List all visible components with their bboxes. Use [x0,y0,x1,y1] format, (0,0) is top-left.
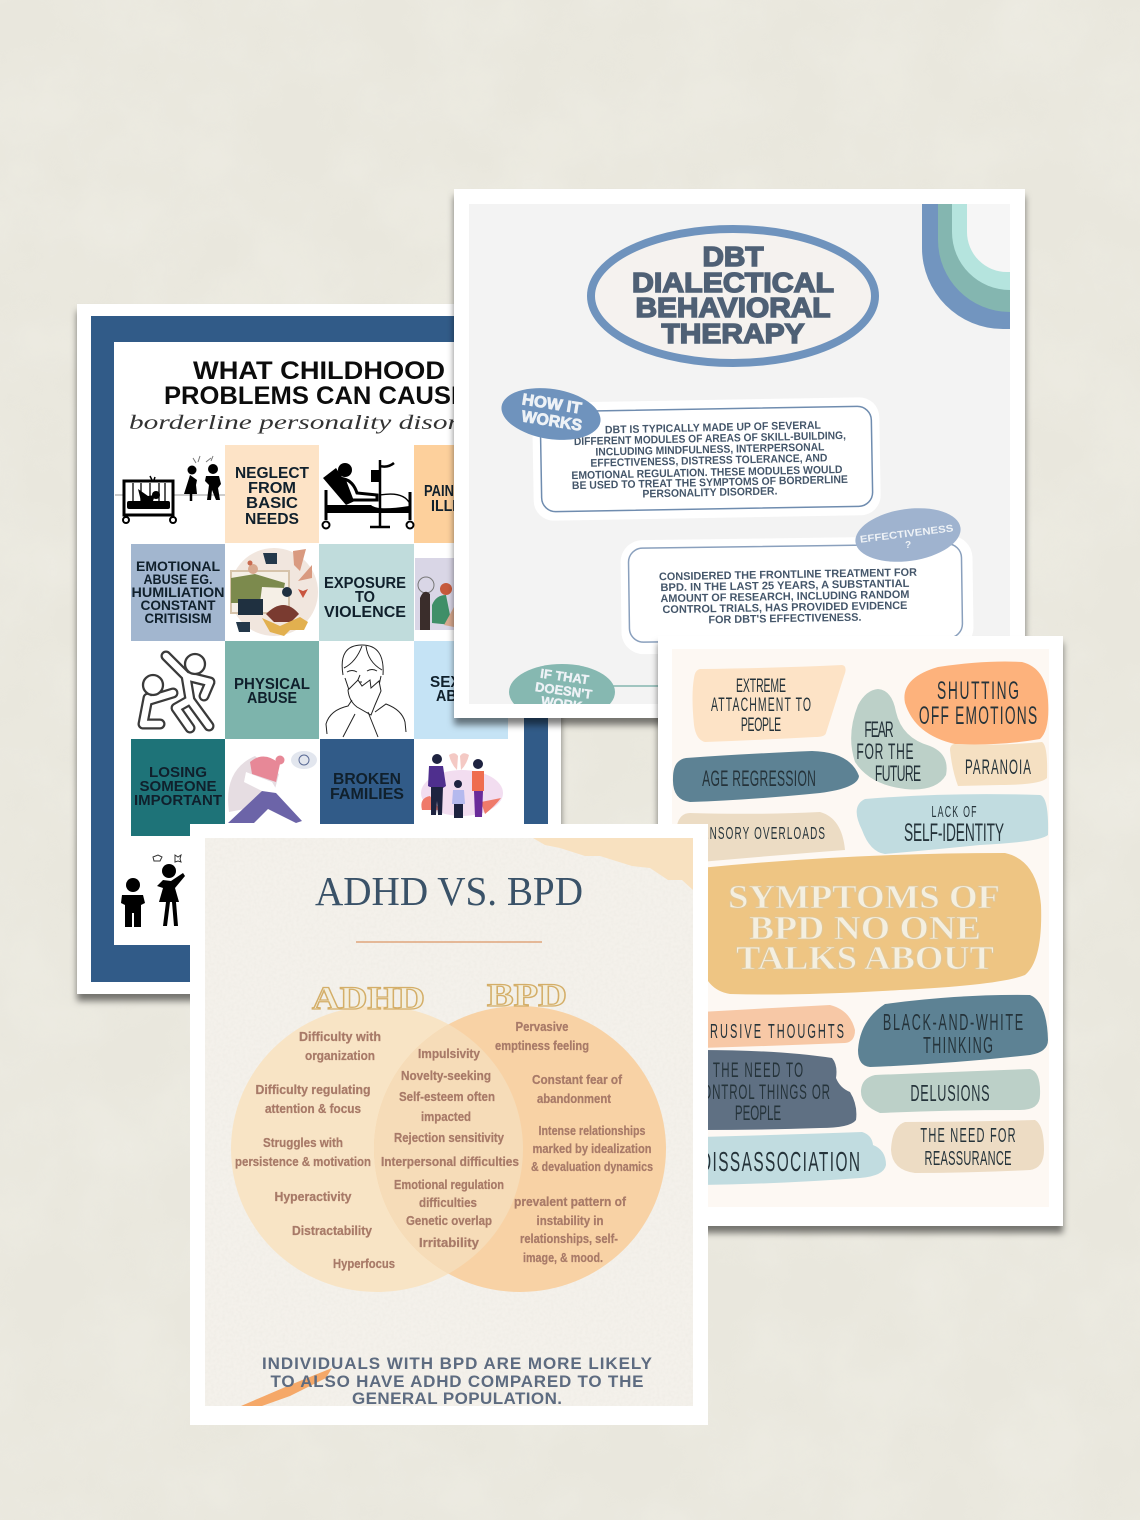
ADHD list: Hyperactivity [274,1189,352,1204]
blob: need to control: CONTROL THINGS OR [693,1080,830,1104]
panel: ADHD vs BPD [190,824,708,1425]
overlap list: Novelty-seeking [401,1068,491,1083]
icon: family separated, broken heart [421,753,503,818]
decorative brush bottom left [241,1368,332,1406]
cell: exposure to violence: VIOLENCE [324,604,406,621]
icon: woman covering mouth [326,645,406,737]
blob: black-and-white thinking: BLACK-AND-WHITE [883,1009,1023,1035]
ADHD list: Struggles with [263,1135,343,1150]
blob: fear for the future: FOR THE [856,739,914,764]
BPD list [495,1019,653,1265]
blob: sensory overloads [677,812,845,862]
text box: effectiveness [620,536,974,654]
cell: neglect from basic needs: NEGLECT [235,465,309,482]
title oval: DBT dialectical behavioral therapy [591,229,875,363]
cell: losing someone important: SOMEONE [140,778,216,795]
blob: lack of self-identity [857,794,1048,854]
blob: lack of self-identity: LACK OF [931,802,977,821]
ADHD list: organization [305,1048,375,1063]
icon: arguing couple silhouette [121,855,185,927]
blob: main title: BPD NO ONE [749,910,981,947]
text box: how it works: INCLUDING MINDFULNESS, INTERPERSONAL [595,441,825,459]
title: ADHD vs BPD: ADHD VS. BPD [315,868,583,914]
blob: extreme attachment: ATTACHMENT TO [711,695,811,716]
blob: extreme attachment: PEOPLE [741,715,781,736]
blob: main title: TALKS ABOUT [736,940,994,977]
BPD list: Pervasive [516,1019,568,1034]
ADHD list: Distractability [292,1223,373,1238]
heading: BPD: BPD [487,978,567,1014]
ADHD list: Hyperfocus [333,1256,395,1271]
cell: emotional abuse [131,544,225,641]
overlap list: Impulsivity [418,1046,481,1061]
ADHD list: attention & focus [265,1101,361,1116]
cell: exposure to violence: TO [355,589,375,606]
cell: broken families [320,739,414,836]
text box: effectiveness: FOR DBT'S EFFECTIVENESS. [708,612,862,626]
decorative brush top right [533,838,693,890]
cell: emotional abuse: HUMILIATION [132,584,224,600]
cell: neglect from basic needs [225,445,319,543]
text box: how it works: BE USED TO TREAT THE SYMPTOMS OF BORDERLINE [572,474,848,492]
blob: main title [698,853,1041,994]
heading: what childhood problems can cause: PROBLEMS CAN CAUSE [164,382,468,410]
icon: baby in crib with arguing parents [115,456,225,523]
blob: need to control: THE NEED TO [713,1058,803,1082]
title oval: DBT dialectical behavioral therapy: THERAPY [662,318,805,349]
blob: delusions [861,1069,1040,1113]
icon: violence scene [415,558,454,630]
cell: exposure to violence: EXPOSURE [324,575,406,592]
pill: if that doesn't work: WORK [540,693,584,714]
text box: how it works: EFFECTIVENESS, DISTRESS TOLERANCE, AND [590,452,828,470]
panel: DBT dialectical behavioral therapy [454,189,1025,720]
BPD list: image, & mood. [523,1250,603,1265]
blob: dissassociation [700,1132,886,1185]
pill: if that doesn't work [509,664,658,704]
cell: neglect from basic needs: BASIC [246,495,298,512]
text box: how it works: EMOTIONAL REGULATION. THESE MODULES WOULD [571,464,843,482]
blob: extreme attachment: EXTREME [736,676,786,697]
pill: if that doesn't work: DOESN'T [534,679,593,702]
cell: losing someone important [131,739,225,836]
overlap list: Irritability [419,1235,480,1250]
blob: age regression: AGE REGRESSION [702,766,816,791]
blob: main title: SYMPTOMS OF [728,879,1000,916]
blob: need to control [693,1050,856,1130]
overlap list: Emotional regulation [394,1177,504,1192]
cell: broken families: FAMILIES [330,786,404,803]
text box: effectiveness: BPD. IN THE LAST 25 YEARS, A SUBSTANTIAL [660,578,910,594]
text box: effectiveness: AMOUNT OF RESEARCH, INCLUDING RANDOM [660,589,910,605]
cell: sexual abuse: ABUSE [436,688,486,705]
text box: how it works: PERSONALITY DISORDER. [642,485,778,501]
panel: childhood problems poster [77,304,561,994]
blob: intrusive thoughts [686,1005,855,1048]
cell: losing someone important: LOSING [149,764,207,781]
cell: neglect from basic needs: FROM [248,480,296,497]
icon: person striking kneeling figure [143,654,210,728]
pill: effectiveness: ? [905,540,911,551]
blob: shutting off emotions [904,662,1048,744]
overlap list: Self-esteem often [399,1089,495,1104]
icon: humiliation illustration [230,548,318,636]
blob: fear for the future: FEAR [864,717,894,742]
text box: how it works [532,397,881,521]
pill: if that doesn't work: IF THAT [539,666,590,687]
ADHD list: Difficulty with [299,1029,381,1044]
cell: broken families: BROKEN [333,771,401,788]
blob: need for reassurance [891,1120,1044,1173]
cell: emotional abuse: CRITISISM [144,610,212,626]
blob: paranoia: PARANOIA [965,755,1031,779]
cell: painful illness: PAINFUL [424,483,479,500]
blob: need to control: PEOPLE [735,1101,781,1125]
BPD list: & devaluation dynamics [531,1159,653,1174]
cell: sexual abuse [414,641,508,739]
blob: delusions: DELUSIONS [910,1080,990,1106]
BPD list: prevalent pattern of [514,1194,627,1209]
ADHD list: persistence & motivation [235,1154,371,1169]
blob: fear for the future [851,689,947,789]
pill: how it works [498,381,604,447]
overlap list: Genetic overlap [406,1213,492,1228]
cell: painful illness: ILLNESS [431,498,491,515]
cell: emotional abuse: ABUSE EG. [144,571,212,587]
decorative rainbow arc [922,204,1010,329]
overlap list: Interpersonal difficulties [381,1154,519,1169]
cell: losing someone important: IMPORTANT [134,792,222,809]
footer statement: INDIVIDUALS WITH BPD ARE MORE LIKELY [262,1354,653,1373]
overlap list: Rejection sensitivity [394,1130,505,1145]
blob: sensory overloads: SENSORY OVERLOADS [694,824,825,844]
cell: painful illness [414,445,508,543]
cell: emotional abuse: CONSTANT [140,597,216,613]
icon: patient in hospital bed [322,460,414,528]
cell: neglect from basic needs: NEEDS [245,511,299,528]
overlap list: difficulties [419,1195,477,1210]
overlap list: impacted [421,1109,471,1124]
BPD list: Intense relationships [538,1123,646,1138]
ADHD list [235,1029,395,1271]
panel: symptoms of BPD no one talks about [658,636,1063,1226]
blob: extreme attachment [692,665,846,742]
BPD list: emptiness feeling [495,1038,589,1053]
BPD list: instability in [536,1213,604,1228]
blob: black-and-white thinking: THINKING [923,1032,993,1058]
cell: sexual abuse: SEXUAL [430,674,492,691]
blob: paranoia [950,742,1047,786]
blob: lack of self-identity: SELF-IDENTITY [904,820,1004,847]
heading: what childhood problems can cause: WHAT CHILDHOOD [193,357,445,385]
cell: physical abuse: ABUSE [247,690,297,707]
text box: how it works: DBT IS TYPICALLY MADE UP OF SEVERAL [605,420,821,436]
BPD list: Constant fear of [532,1072,623,1087]
footer statement [262,1354,653,1408]
subtitle: borderline personality disorder: borderline personality disorder [129,412,497,434]
cell: physical abuse [225,641,319,739]
title oval: DBT dialectical behavioral therapy: BEHAVIORAL [636,292,830,323]
footer statement: TO ALSO HAVE ADHD COMPARED TO THE [270,1372,644,1391]
text box: how it works: DIFFERENT MODULES OF AREAS OF SKILL-BUILDING, [574,430,846,448]
blob: shutting off emotions: OFF EMOTIONS [919,703,1037,730]
heading: ADHD: ADHD [312,981,425,1017]
title oval: DBT dialectical behavioral therapy: DIALECTICAL [632,267,834,298]
blob: intrusive thoughts: INTRUSIVE THOUGHTS [686,1021,844,1043]
title oval: DBT dialectical behavioral therapy: DBT [702,241,764,272]
blob: dissassociation: DISSASSOCIATION [700,1146,860,1177]
pill: how it works: HOW IT [521,391,583,418]
BPD list: relationships, self- [520,1231,618,1246]
pill: how it works: WORKS [520,408,583,435]
blob: age regression [673,751,859,802]
ADHD list: Difficulty regulating [256,1082,371,1097]
overlap list [381,1046,519,1250]
cell: physical abuse: PHYSICAL [234,676,310,693]
icon: sad person with tangled thoughts [228,751,317,823]
blob: shutting off emotions: SHUTTING [937,678,1019,705]
blob: fear for the future: FUTURE [875,761,921,786]
footer statement: GENERAL POPULATION. [352,1389,562,1408]
text box: effectiveness: CONSIDERED THE FRONTLINE TREATMENT FOR [659,567,917,583]
blob: need for reassurance: THE NEED FOR [920,1125,1016,1147]
BPD list: abandonment [537,1091,612,1106]
heading: what childhood problems can cause [164,357,468,410]
venn diagram [231,978,666,1292]
pill: effectiveness [852,502,964,568]
pill: effectiveness: EFFECTIVENESS [859,523,954,546]
cell: emotional abuse: EMOTIONAL [136,558,220,574]
cell: exposure to violence [319,544,414,641]
blob: need for reassurance: REASSURANCE [925,1148,1012,1170]
blob: black-and-white thinking [858,995,1048,1067]
text box: effectiveness: CONTROL TRIALS, HAS PROVIDED EVIDENCE [662,600,908,616]
BPD list: marked by idealization [532,1141,652,1156]
